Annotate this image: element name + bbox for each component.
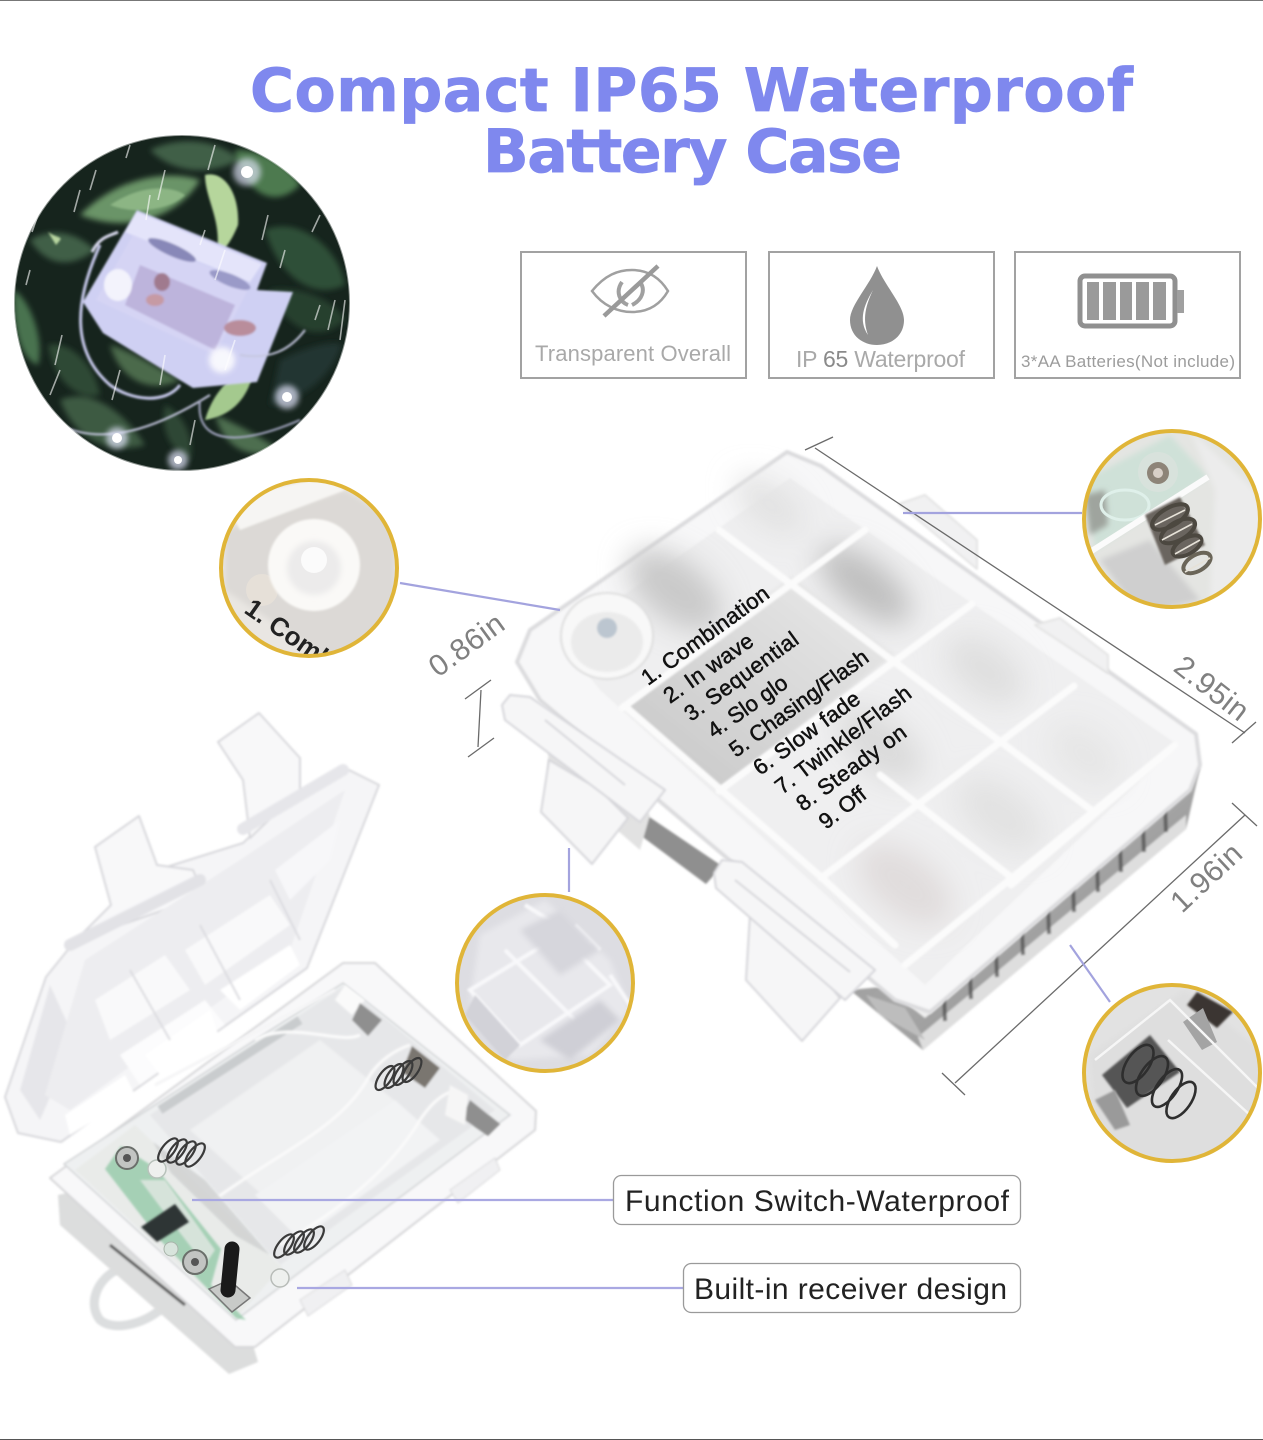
label: Built-in receiver design: Built-in receiver design <box>694 1273 1007 1306</box>
sub-element: hanging loop <box>94 1268 165 1326</box>
photo: battery case among leaves in the rain <box>14 135 350 471</box>
feature box: transparent overall <box>521 252 746 378</box>
sub-element: function list: 1. Combination <box>636 580 774 690</box>
dimension: 0.86in height: 0.86in <box>423 607 511 684</box>
sub-element: function list <box>636 580 916 834</box>
sub-element: function list: 4. Slo glo <box>703 670 792 743</box>
callout lines to open-case labels <box>192 1200 683 1288</box>
title: Battery Case <box>483 117 902 187</box>
sub-element: case base <box>50 963 536 1374</box>
detail circle: rubber button <box>219 478 399 658</box>
callout lines to detail circles <box>400 513 1110 1002</box>
sub-element: lid <box>517 452 1200 1012</box>
sub-element: cell shading <box>613 465 1132 943</box>
dimension: 1.96in width <box>942 803 1257 1095</box>
closed case: top view with function list <box>502 452 1200 1050</box>
sub-element: battery compartments <box>150 985 500 1265</box>
title <box>250 56 1134 187</box>
sub-element: rubber button <box>561 593 653 679</box>
label: Built-in receiver design <box>684 1264 1020 1312</box>
sub-element: function list: 2. In wave <box>659 628 758 708</box>
sub-element: rain streaks <box>26 145 345 460</box>
label: IP65 Waterproof: IP 65 Waterproof <box>796 346 966 372</box>
dimension: 1.96in width: 1.96in <box>1164 837 1249 919</box>
dimension: 0.86in height <box>423 607 511 757</box>
detail circle: contact spring <box>1080 982 1263 1167</box>
feature box: batteries <box>1015 252 1240 378</box>
sub-element: transparent case in photo <box>60 210 305 437</box>
sub-element: function list: 9. Off <box>814 781 872 834</box>
label: Function Switch-Waterproof <box>614 1176 1020 1224</box>
title: Compact IP65 Waterproof <box>250 56 1134 126</box>
sub-element: hinges and tabs <box>502 495 1108 1041</box>
label: Transparent Overall: Transparent Overall <box>535 341 731 366</box>
sub-element: circuit board <box>75 1125 289 1320</box>
sub-element: case body side <box>548 712 1200 1050</box>
feature box: IP65 waterproof <box>769 252 994 378</box>
sub-element: function list: 8. Steady on <box>791 719 911 816</box>
sub-element: function list: 7. Twinkle/Flash <box>770 680 916 799</box>
photo edge softening <box>14 135 350 471</box>
label: Function Switch-Waterproof: Function Switch-Waterproof <box>625 1185 1010 1218</box>
detail circle: spring and screw <box>1080 428 1263 615</box>
sub-element: label panel <box>626 577 894 790</box>
sub-element: glowing LEDs <box>106 158 299 470</box>
dimension: 2.95in length: 2.95in <box>1168 650 1255 728</box>
sub-element: open lid <box>5 713 379 1142</box>
icon: battery <box>1080 276 1184 326</box>
sub-element: grid ribs <box>622 530 1175 965</box>
icon: water drop <box>850 266 904 345</box>
detail circle: rubber button: 1. Combination <box>240 592 411 725</box>
icon: crossed-out eye <box>592 266 668 316</box>
dimension: 2.95in length <box>805 437 1256 743</box>
sub-element: function list: 3. Sequential <box>679 626 803 726</box>
sub-element: function list: 5. Chasing/Flash <box>724 644 873 762</box>
detail circle: latch clip <box>455 893 635 1073</box>
label: 3*AA Batteries: 3*AA Batteries(Not include) <box>1021 352 1235 371</box>
sub-element: springs <box>155 1055 425 1261</box>
open case: lid and battery compartment <box>5 713 536 1374</box>
sub-element: function list: 6. Slow fade <box>748 686 865 780</box>
